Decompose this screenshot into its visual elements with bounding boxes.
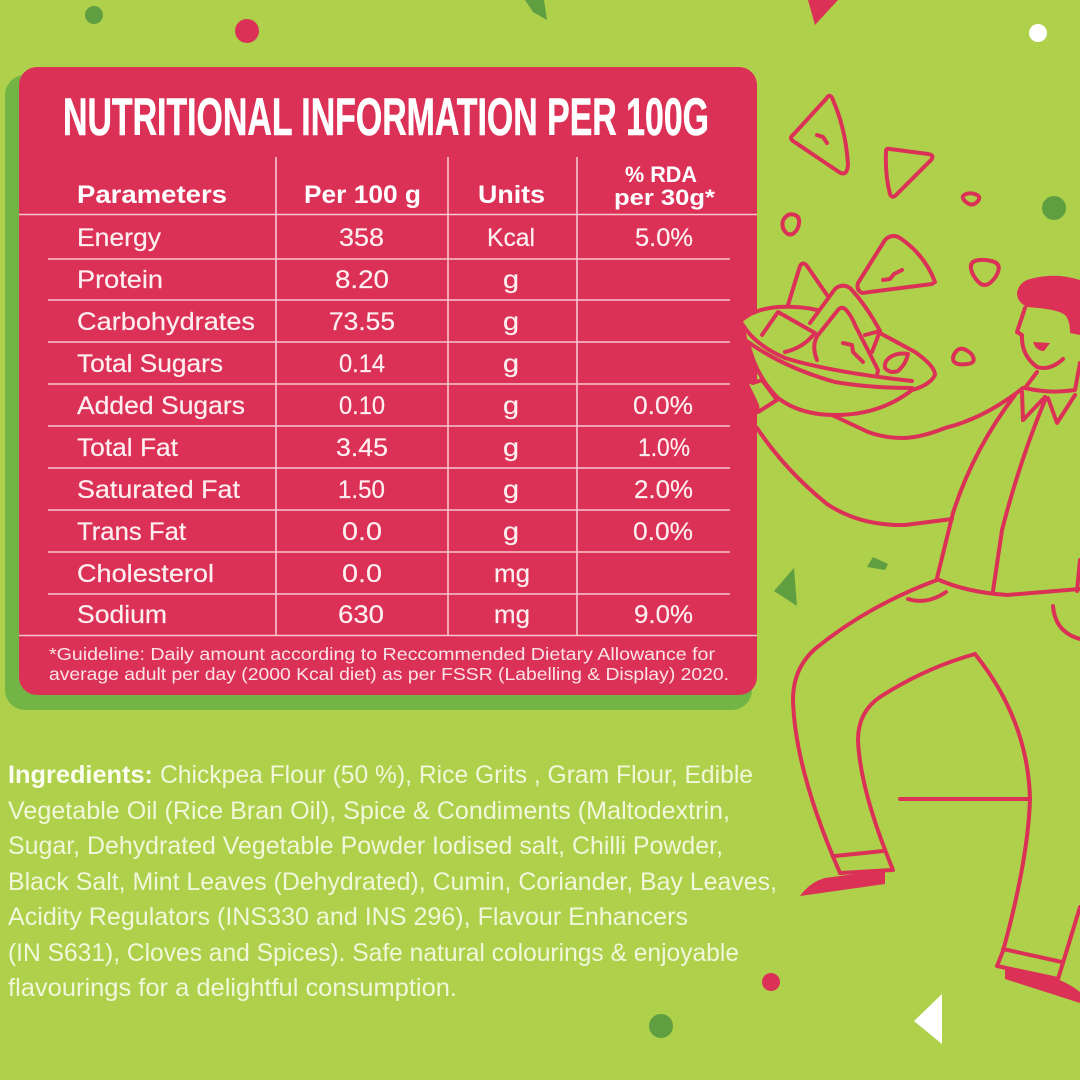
table column: per 100 g: [329, 224, 395, 629]
man: trousers and pockets: [793, 580, 1080, 979]
ingredients text: Chickpea Flour (50 %), Rice Grits , Gram Flour, Edible: [160, 761, 753, 789]
table column: % RDA: 0.0%: [633, 518, 693, 546]
table column: parameters: Added Sugars: [77, 392, 245, 420]
table column: parameters: Total Sugars: [77, 350, 223, 378]
man: shirt, collar and arm: [757, 388, 1080, 595]
table column: per 100 g: 358: [339, 224, 384, 252]
table header: % RDA: [625, 162, 697, 187]
ingredients text: (IN S631), Cloves and Spices). Safe natural colourings & enjoyable: [8, 939, 739, 967]
table column: % RDA: 0.0%: [633, 392, 693, 420]
man: head and hair: [1017, 276, 1080, 392]
table column: units: [487, 224, 535, 629]
table column: units: g: [503, 308, 519, 336]
icon: flying chips: [782, 96, 999, 364]
panel: nutrition card: [19, 67, 757, 695]
table column: per 100 g: 0.0: [342, 518, 382, 546]
table column: % RDA: 1.0%: [638, 434, 690, 462]
table column: units: g: [503, 266, 519, 294]
table column: units: mg: [494, 601, 530, 629]
illustration: man tossing snacks from a bowl: [743, 96, 1080, 1003]
table column: parameters: Sodium: [77, 601, 167, 629]
footnote: *Guideline: Daily amount according to Reccommended Dietary Allowance for: [49, 644, 715, 664]
icon: bowl with chips: [743, 264, 935, 415]
table column: parameters: Energy: [77, 224, 162, 252]
ingredients text: Black Salt, Mint Leaves (Dehydrated), Cumin, Coriander, Bay Leaves,: [8, 868, 777, 896]
table column: units: g: [503, 518, 519, 546]
ingredients text: Ingredients:: [8, 761, 153, 789]
table column: per 100 g: 8.20: [335, 266, 389, 294]
table column: parameters: Saturated Fat: [77, 476, 240, 504]
table column: per 100 g: 630: [338, 601, 384, 629]
title: NUTRITIONAL INFORMATION PER 100G: [63, 88, 709, 147]
table header: per 30g*: [614, 185, 715, 210]
table column: per 100 g: 1.50: [338, 476, 385, 504]
table column: parameters: Carbohydrates: [77, 308, 255, 336]
footnote: [49, 644, 729, 684]
table column: parameters: Cholesterol: [77, 560, 214, 588]
table grid: [19, 157, 757, 636]
table column: parameters: Trans Fat: [77, 518, 186, 546]
table header: Per 100 g: [304, 181, 421, 209]
ingredients text: Acidity Regulators (INS330 and INS 296), Flavour Enhancers: [8, 903, 688, 931]
table column: parameters: Protein: [77, 266, 163, 294]
table column: units: g: [503, 476, 519, 504]
ingredients text: [8, 761, 777, 1002]
table column: per 100 g: 0.14: [339, 350, 385, 378]
ingredients text: Vegetable Oil (Rice Bran Oil), Spice & Condiments (Maltodextrin,: [8, 797, 730, 825]
table column: units: Kcal: [487, 224, 535, 252]
table column: per 100 g: 3.45: [336, 434, 388, 462]
ingredients text: flavourings for a delightful consumption.: [8, 974, 457, 1002]
ingredients text: Sugar, Dehydrated Vegetable Powder Iodised salt, Chilli Powder,: [8, 832, 723, 860]
table column: units: g: [503, 350, 519, 378]
table column: per 100 g: 0.10: [339, 392, 385, 420]
icon: hand under bowl: [745, 380, 777, 412]
table column: % RDA: [633, 224, 693, 629]
table column: % RDA: 5.0%: [635, 224, 693, 252]
table column: per 100 g: 73.55: [329, 308, 395, 336]
footnote: average adult per day (2000 Kcal diet) as per FSSR (Labelling & Display) 2020.: [49, 664, 729, 684]
table column: % RDA: 2.0%: [634, 476, 693, 504]
table column: per 100 g: 0.0: [342, 560, 382, 588]
man: shoes: [800, 870, 1080, 1003]
panel: card shadow: [5, 75, 752, 710]
table header: Parameters: [77, 181, 227, 209]
table column: units: mg: [494, 560, 530, 588]
table column: parameters: [77, 224, 255, 629]
table column: parameters: Total Fat: [77, 434, 178, 462]
table header: Units: [478, 181, 545, 209]
table column: units: g: [503, 392, 519, 420]
table column: % RDA: 9.0%: [634, 601, 693, 629]
table column: units: g: [503, 434, 519, 462]
table header: [77, 162, 715, 210]
